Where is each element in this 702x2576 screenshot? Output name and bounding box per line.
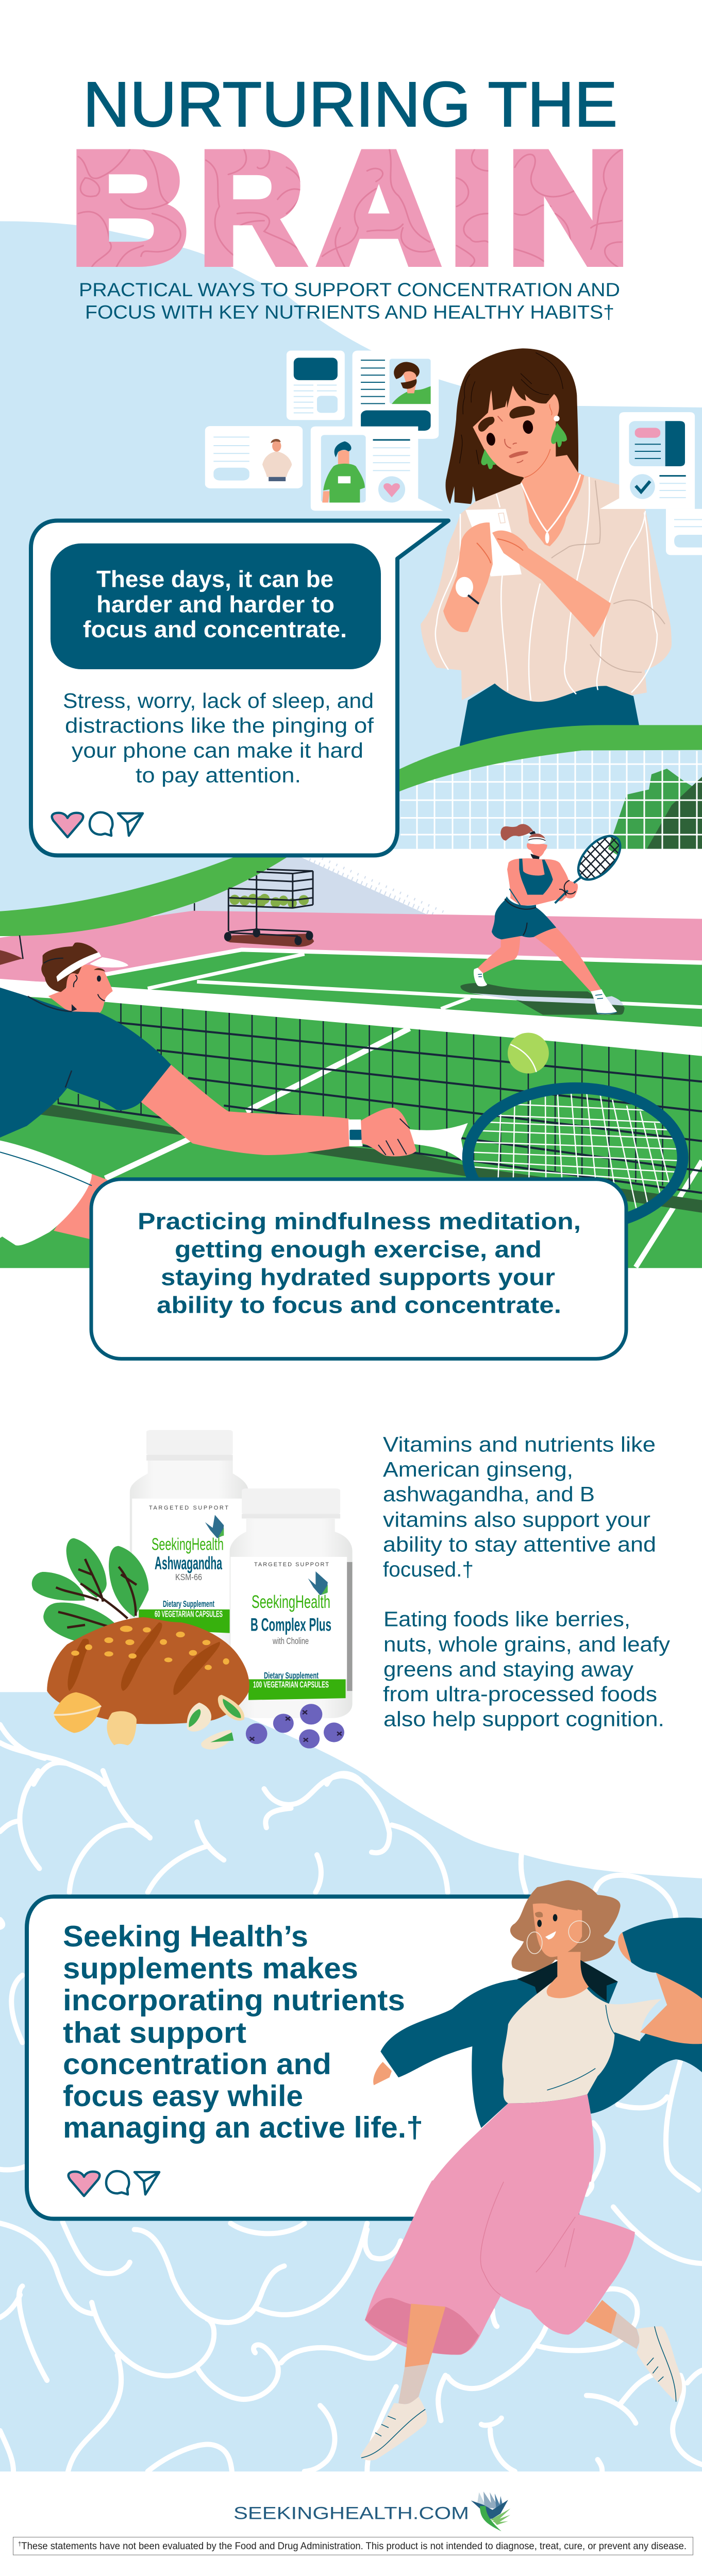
callout: mindfulness: ability to focus and concentrate. — [157, 1292, 561, 1318]
torso and arms — [507, 858, 578, 906]
net top band — [0, 979, 702, 1056]
tank top — [519, 859, 553, 895]
legs — [478, 936, 520, 973]
panel text: incorporating nutrients — [63, 1984, 405, 2017]
title: Brain with brain pattern: A — [317, 119, 440, 297]
ball cart and tent — [0, 869, 314, 965]
body text: your phone can make it hard — [72, 739, 363, 762]
product: B Complex Plus bottle: SeekingHealth — [252, 1591, 330, 1612]
illustration: woman looking at phone — [421, 348, 672, 756]
net mesh — [58, 1003, 690, 1190]
watch — [456, 577, 473, 597]
blouse — [421, 474, 672, 702]
panel text: concentration and — [63, 2048, 331, 2081]
green curved band — [0, 725, 702, 936]
head, hair and chest — [445, 348, 584, 546]
text: vitamins and nutrients: Vitamins and nutrients like — [383, 1433, 656, 1456]
product: Ashwagandha bottle — [130, 1430, 248, 1650]
headline panel: These days, it can be — [96, 566, 333, 592]
text: eating foods: nuts, whole grains, and leafy — [383, 1633, 671, 1656]
headline panel: focus and concentrate. — [83, 616, 347, 642]
text: eating foods: from ultra-processed foods — [383, 1682, 657, 1706]
icons: like, comment, share — [69, 2171, 159, 2196]
body text: Stress, worry, lack of sleep, and — [63, 689, 374, 713]
subtitle: PRACTICAL WAYS TO SUPPORT CONCENTRATION AND — [79, 279, 620, 300]
head — [41, 942, 128, 1016]
legs, arm and racket throat — [0, 1065, 468, 1246]
foreground court lines — [105, 1028, 410, 1178]
background: lower blue wave — [0, 1692, 702, 2471]
earrings — [554, 416, 560, 421]
product: B Complex Plus bottle: Dietary Supplement — [264, 1670, 319, 1681]
speech bubble: focus intro — [31, 520, 448, 855]
hands and arms — [443, 522, 493, 632]
panel text: focus easy while — [63, 2080, 303, 2113]
racket head — [468, 1088, 685, 1227]
shoes — [474, 968, 487, 987]
product: Ashwagandha bottle: 60 VEGETARIAN CAPSULES — [155, 1609, 223, 1619]
title: Brain with brain pattern: I — [448, 119, 495, 297]
profile card: cropped at right edge — [666, 509, 702, 555]
panel: Seeking Health supplements — [27, 1896, 577, 2219]
icons: like, comment, share — [52, 812, 143, 837]
hummingbird logos on bottles — [205, 1515, 328, 1595]
phone — [465, 509, 522, 577]
profile card: man in green shirt with heart — [311, 427, 443, 511]
title: Brain with brain pattern: R — [198, 119, 305, 297]
callout: mindfulness — [91, 1179, 626, 1359]
head — [528, 834, 545, 841]
profile card: checklist — [600, 412, 695, 509]
headline panel: harder and harder to — [96, 591, 335, 618]
background: top blue wave — [0, 221, 702, 964]
chest — [521, 463, 584, 546]
title: Brain with brain pattern — [76, 149, 623, 267]
product: B Complex Plus bottle: 100 VEGETARIAN CAPSULES — [253, 1680, 329, 1690]
disclaimer: † — [18, 2540, 21, 2548]
text: vitamins and nutrients: vitamins also support your — [383, 1508, 650, 1531]
text: eating foods: also help support cognition. — [383, 1707, 664, 1731]
ponytail — [500, 824, 534, 841]
court surround: fence panel — [400, 746, 702, 853]
title: Brain with brain pattern: N — [506, 119, 630, 297]
racket — [555, 877, 581, 903]
court surface — [0, 948, 702, 1268]
wristbands — [559, 880, 576, 895]
product: B Complex Plus bottle: B Complex Plus — [250, 1615, 331, 1635]
icon: hummingbird — [471, 2492, 510, 2531]
callout: mindfulness: Practicing mindfulness meditation, — [138, 1209, 581, 1234]
text: eating foods: Eating foods like berries, — [383, 1607, 630, 1631]
body text — [63, 689, 374, 787]
body text: distractions like the pinging of — [65, 714, 374, 737]
product: B Complex Plus bottle — [230, 1488, 353, 1718]
necklace — [521, 474, 580, 532]
subtitle — [79, 279, 620, 323]
callout: mindfulness: getting enough exercise, and — [175, 1236, 542, 1262]
tennis ball — [508, 1032, 549, 1074]
text: eating foods: greens and staying away — [383, 1657, 634, 1681]
profile card: bearded man — [353, 350, 439, 439]
panel text: that support — [63, 2016, 246, 2049]
shadow — [460, 983, 625, 1015]
disclaimer — [13, 2537, 693, 2555]
title: Nurturing the: NURTURING THE — [83, 70, 617, 140]
back court lines — [105, 950, 702, 974]
upper body — [373, 1880, 702, 2182]
profile card: standing person — [205, 426, 303, 488]
mouth — [509, 451, 528, 458]
panel text: managing an active life.† — [63, 2111, 423, 2144]
court surround: white ground and back wall — [0, 849, 702, 964]
skirt and legs — [360, 2180, 682, 2461]
body text: to pay attention. — [136, 764, 301, 787]
text: vitamins and nutrients: ashwagandha, and B — [383, 1482, 595, 1506]
illustration: woman walking in pink skirt — [360, 1880, 702, 2461]
product: Ashwagandha bottle: Ashwagandha — [155, 1553, 223, 1573]
text: eating foods — [383, 1607, 671, 1731]
product: B Complex Plus bottle: TARGETED SUPPORT — [254, 1562, 329, 1568]
eyebrows — [478, 406, 535, 432]
hair — [445, 348, 578, 504]
blueberries — [246, 1704, 344, 1749]
product: Ashwagandha bottle: TARGETED SUPPORT — [149, 1505, 228, 1511]
headline panel — [51, 544, 381, 669]
footer: website and logo — [233, 2492, 510, 2531]
hair strands — [460, 352, 563, 464]
text: vitamins and nutrients — [383, 1433, 656, 1581]
bread — [47, 1617, 249, 1724]
leaves — [66, 1538, 107, 1598]
food: leaves, bread, nuts and blueberries — [32, 1538, 344, 1750]
player: woman at back of court — [460, 824, 630, 1015]
profile card: article with bar — [287, 350, 345, 420]
text: vitamins and nutrients: American ginseng, — [383, 1458, 573, 1481]
product: Ashwagandha bottle: KSM-66 — [175, 1572, 202, 1582]
tennis court with net — [0, 948, 702, 1268]
pink court surround — [0, 911, 702, 982]
nuts — [54, 1692, 101, 1733]
background: white brain squiggles — [0, 1724, 702, 2471]
text: vitamins and nutrients: ability to stay attentive and — [383, 1533, 656, 1556]
face and neck — [473, 385, 580, 514]
callout: mindfulness: staying hydrated supports your — [161, 1264, 555, 1291]
panel text — [63, 1920, 423, 2144]
blouse stripes — [436, 477, 657, 700]
text: vitamins and nutrients: focused.† — [383, 1557, 474, 1581]
panel text: supplements makes — [63, 1952, 358, 1985]
footer: website and logo: SEEKINGHEALTH.COM — [233, 2504, 469, 2523]
panel text: Seeking Health’s — [63, 1920, 308, 1953]
player: man reaching with racket — [0, 942, 685, 1246]
title: Brain with brain pattern: B — [70, 119, 190, 297]
product: Ashwagandha bottle: Dietary Supplement — [163, 1599, 214, 1609]
subtitle: FOCUS WITH KEY NUTRIENTS AND HEALTHY HABITS† — [85, 301, 614, 323]
skirt — [458, 684, 640, 756]
shorts — [492, 896, 556, 940]
shirt — [0, 988, 171, 1138]
product: B Complex Plus bottle: with Choline — [272, 1636, 309, 1646]
eyes — [522, 419, 534, 434]
net shadow — [38, 1104, 702, 1213]
product: Ashwagandha bottle: SeekingHealth — [152, 1535, 224, 1554]
